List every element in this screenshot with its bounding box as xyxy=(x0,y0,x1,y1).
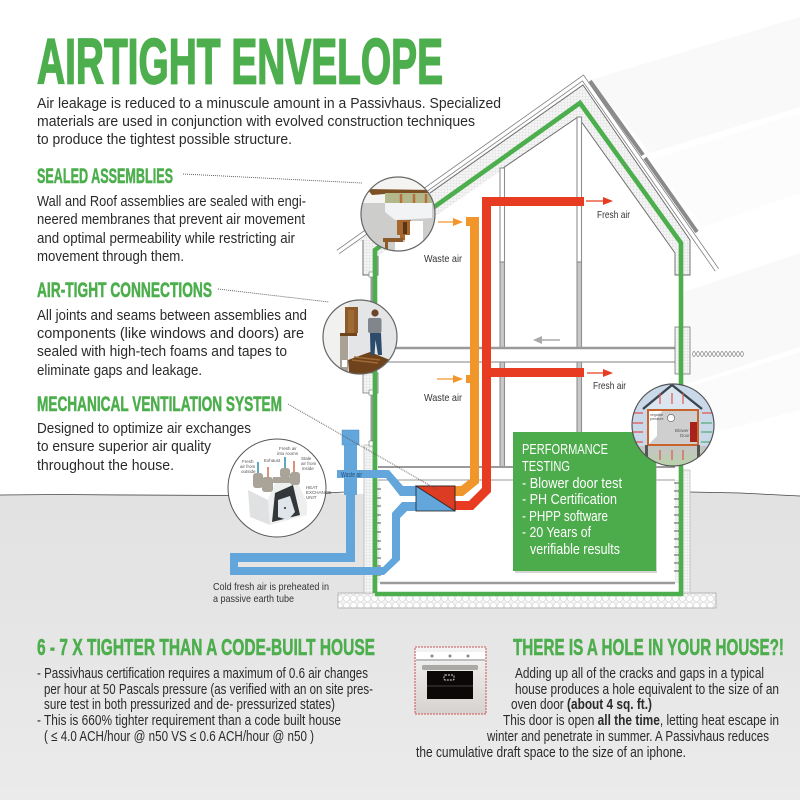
detail circle: blower door test: Door xyxy=(680,433,690,438)
heading: air-tight connections: AIR-TIGHT CONNECTIONS xyxy=(37,279,212,302)
ground xyxy=(0,492,800,800)
unit labels: into rooms xyxy=(277,451,299,456)
red fresh air duct xyxy=(455,197,584,510)
text: sealed assemblies xyxy=(37,193,306,265)
text: tighter than code: - This is 660% tighter requirement than a code built house xyxy=(37,713,341,729)
heading: mechanical ventilation system: MECHANICAL VENTILATION SYSTEM xyxy=(37,393,282,416)
text: mechanical ventilation: Designed to optimize air exchanges xyxy=(37,420,251,437)
intro text: to produce the tightest possible structure. xyxy=(37,131,292,148)
performance testing box: - 20 Years of xyxy=(522,525,592,541)
text: air-tight connections: sealed with high-tech foams and tapes to xyxy=(37,343,287,360)
text: mechanical ventilation: throughout the house. xyxy=(37,457,174,474)
house cross-section xyxy=(230,78,744,608)
detail circle: roof assembly xyxy=(361,177,435,254)
detail circle: blower door test: pressure xyxy=(650,417,664,421)
unit labels xyxy=(240,446,331,500)
callout lines xyxy=(183,174,436,489)
roof insulation xyxy=(350,84,690,275)
text: tighter than code: per hour at 50 Pascals pressure (as verified with an on site pres- xyxy=(44,682,373,698)
unit labels: HEAT xyxy=(306,485,318,490)
wall joints xyxy=(369,272,374,446)
text: hole in your house xyxy=(416,666,779,761)
diagram labels xyxy=(213,209,630,605)
diagram labels: Cold fresh air is preheated in xyxy=(213,581,329,593)
diagram labels: Waste air xyxy=(424,253,462,265)
detail circle: blower door test: negative xyxy=(650,413,663,417)
text: sealed assemblies: Wall and Roof assemblies are sealed with engi- xyxy=(37,193,306,210)
house interior xyxy=(375,110,680,593)
text: air-tight connections: components (like windows and doors) are xyxy=(37,325,304,342)
air flow arrows xyxy=(437,197,613,383)
performance testing box: PERFORMANCE xyxy=(522,442,608,458)
performance testing box xyxy=(513,432,657,573)
unit labels: Fresh xyxy=(242,459,254,464)
performance testing box: - PHPP software xyxy=(522,509,608,525)
text: tighter than code: ( ≤ 4.0 ACH/hour @ n50 VS ≤ 0.6 ACH/hour @ n50 ) xyxy=(44,729,314,745)
intro text: Air leakage is reduced to a minuscule amount in a Passivhaus. Specialized xyxy=(37,95,501,112)
floors xyxy=(372,275,675,583)
diagram labels: a passive earth tube xyxy=(213,593,294,605)
foundation wall and footing xyxy=(338,445,716,608)
text: mechanical ventilation xyxy=(37,420,251,474)
detail circle: heat recovery unit xyxy=(228,439,331,537)
detail circle: blower door test: Blower xyxy=(675,428,689,433)
diagram labels: Fresh air xyxy=(597,209,630,221)
heat exchanger xyxy=(416,486,455,511)
text: sealed assemblies: neered membranes that prevent air movement xyxy=(37,211,306,228)
intro text: materials are used in conjunction with evolved construction techniques xyxy=(37,113,475,130)
performance testing box: verifiable results xyxy=(530,542,620,558)
performance testing box: - PH Certification xyxy=(522,492,617,508)
text: mechanical ventilation: to ensure superior air quality xyxy=(37,438,211,455)
outdoor deck xyxy=(692,351,744,357)
ground line xyxy=(0,492,800,496)
text: sealed assemblies: and optimal permeability while restricting air xyxy=(37,230,295,247)
unit labels: air from xyxy=(240,464,256,469)
performance testing box: - Blower door test xyxy=(522,476,622,492)
title: AIRTIGHT ENVELOPE xyxy=(37,26,443,98)
orange waste air duct xyxy=(455,217,479,496)
diagram labels: Fresh air xyxy=(593,380,626,392)
text: hole in your house: This door is open all the time, letting heat escape in xyxy=(503,713,779,729)
unit labels: Stale xyxy=(301,456,312,461)
text: hole in your house: oven door (about 4 sq. ft.) xyxy=(511,697,652,713)
roof sheathing xyxy=(338,78,717,275)
heading: sealed assemblies: SEALED ASSEMBLIES xyxy=(37,165,173,188)
text: sealed assemblies: movement through them. xyxy=(37,248,184,265)
text: air-tight connections: eliminate gaps and leakage. xyxy=(37,362,202,379)
text: air-tight connections xyxy=(37,307,307,379)
diagram labels: Waste air xyxy=(341,470,362,479)
interior partitions xyxy=(500,117,582,467)
diagram labels: Waste air xyxy=(424,392,462,404)
text: tighter than code xyxy=(37,666,373,745)
unit labels: Fresh air xyxy=(279,446,297,451)
unit labels: outside xyxy=(241,469,256,474)
icon: person xyxy=(368,309,382,355)
icon: ventilation unit xyxy=(248,457,307,525)
unit labels: Exhaust xyxy=(264,458,281,463)
text: air-tight connections: All joints and seams between assemblies and xyxy=(37,307,307,324)
unit labels: UNIT xyxy=(306,495,317,500)
detail circle: window and person xyxy=(320,300,397,380)
airtight green membrane xyxy=(375,103,681,594)
unit labels: EXCHANGE xyxy=(306,490,331,495)
text: tighter than code: - Passivhaus certification requires a maximum of 0.6 air changes xyxy=(37,666,368,682)
unit labels: air from xyxy=(301,461,317,466)
heading: tighter than code: 6 - 7 X TIGHTER THAN A CODE-BUILT HOUSE xyxy=(37,634,375,660)
text: hole in your house: the cumulative draft space to the size of an iphone. xyxy=(416,745,686,761)
detail circle: blower door test xyxy=(632,384,714,469)
text: tighter than code: sure test in both pressurized and de- pressurized states) xyxy=(44,697,335,713)
exterior wall pieces xyxy=(363,327,690,393)
blue ducts xyxy=(230,430,416,575)
intro text xyxy=(37,95,501,148)
unit labels: inside xyxy=(302,466,314,471)
icon: oven xyxy=(415,647,486,714)
solar panels xyxy=(590,81,697,232)
performance testing box: TESTING xyxy=(522,459,570,475)
